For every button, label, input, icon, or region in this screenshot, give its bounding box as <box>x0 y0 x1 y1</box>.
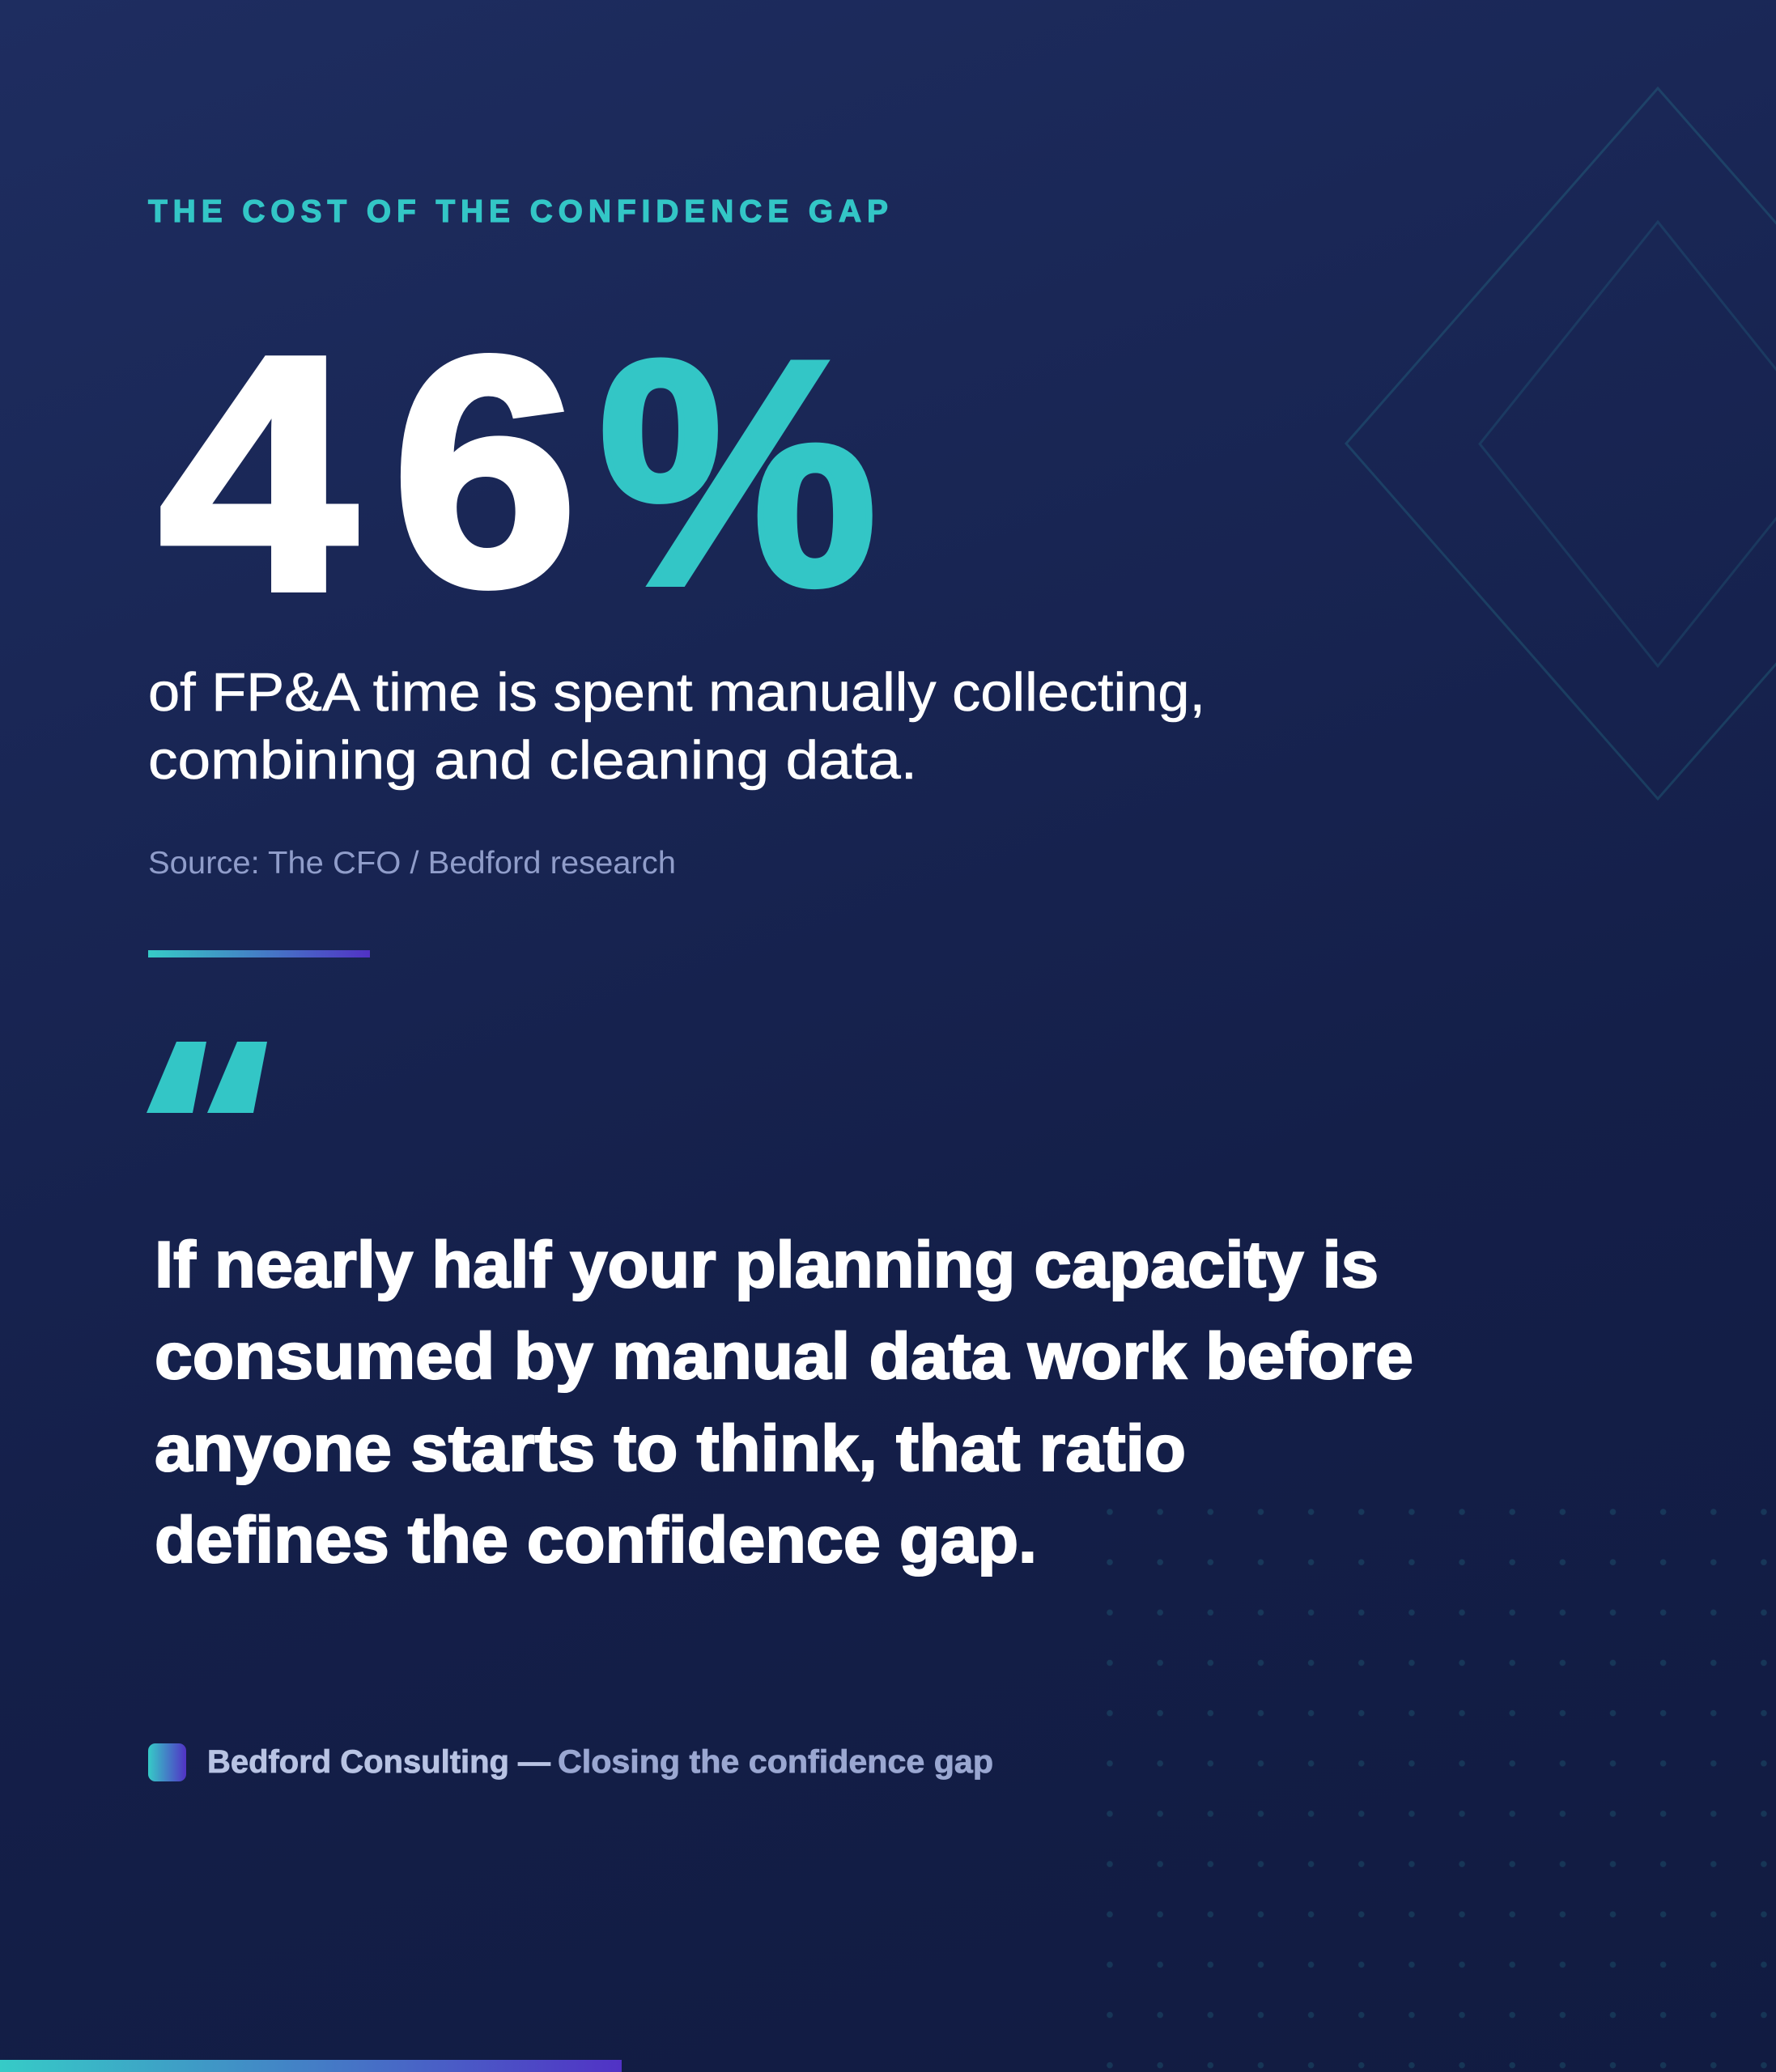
pull quote: If nearly half your planning capacity is <box>155 1229 1379 1301</box>
pull quote <box>155 1229 1413 1577</box>
footer brand line <box>207 1744 993 1780</box>
big statistic: 46%: 4 <box>159 288 359 660</box>
statistic description <box>148 662 1205 791</box>
accent divider <box>148 950 370 957</box>
big statistic: 46%: % <box>598 294 877 652</box>
pull quote: anyone starts to think, that ratio <box>155 1412 1186 1485</box>
footer logo mark <box>148 1743 186 1781</box>
statistic description: of FP&A time is spent manually collecting, <box>148 662 1205 723</box>
statistic description: combining and cleaning data. <box>148 730 917 791</box>
eyebrow heading: THE COST OF THE CONFIDENCE GAP <box>148 194 888 229</box>
source line: Source: The CFO / Bedford research <box>148 846 676 881</box>
pull quote: defines the confidence gap. <box>155 1504 1037 1577</box>
big statistic: 46% <box>159 288 877 660</box>
icon: quotation mark <box>147 1042 267 1113</box>
footer brand line: Closing the confidence gap <box>558 1744 993 1780</box>
bottom accent bar <box>0 2060 622 2072</box>
footer brand line: Bedford Consulting — <box>207 1744 550 1780</box>
big statistic: 46%: 6 <box>393 290 577 652</box>
pull quote: consumed by manual data work before <box>155 1320 1413 1393</box>
dot grid pattern <box>1085 1487 1776 2072</box>
decorative diamond outlines <box>1346 88 1776 799</box>
